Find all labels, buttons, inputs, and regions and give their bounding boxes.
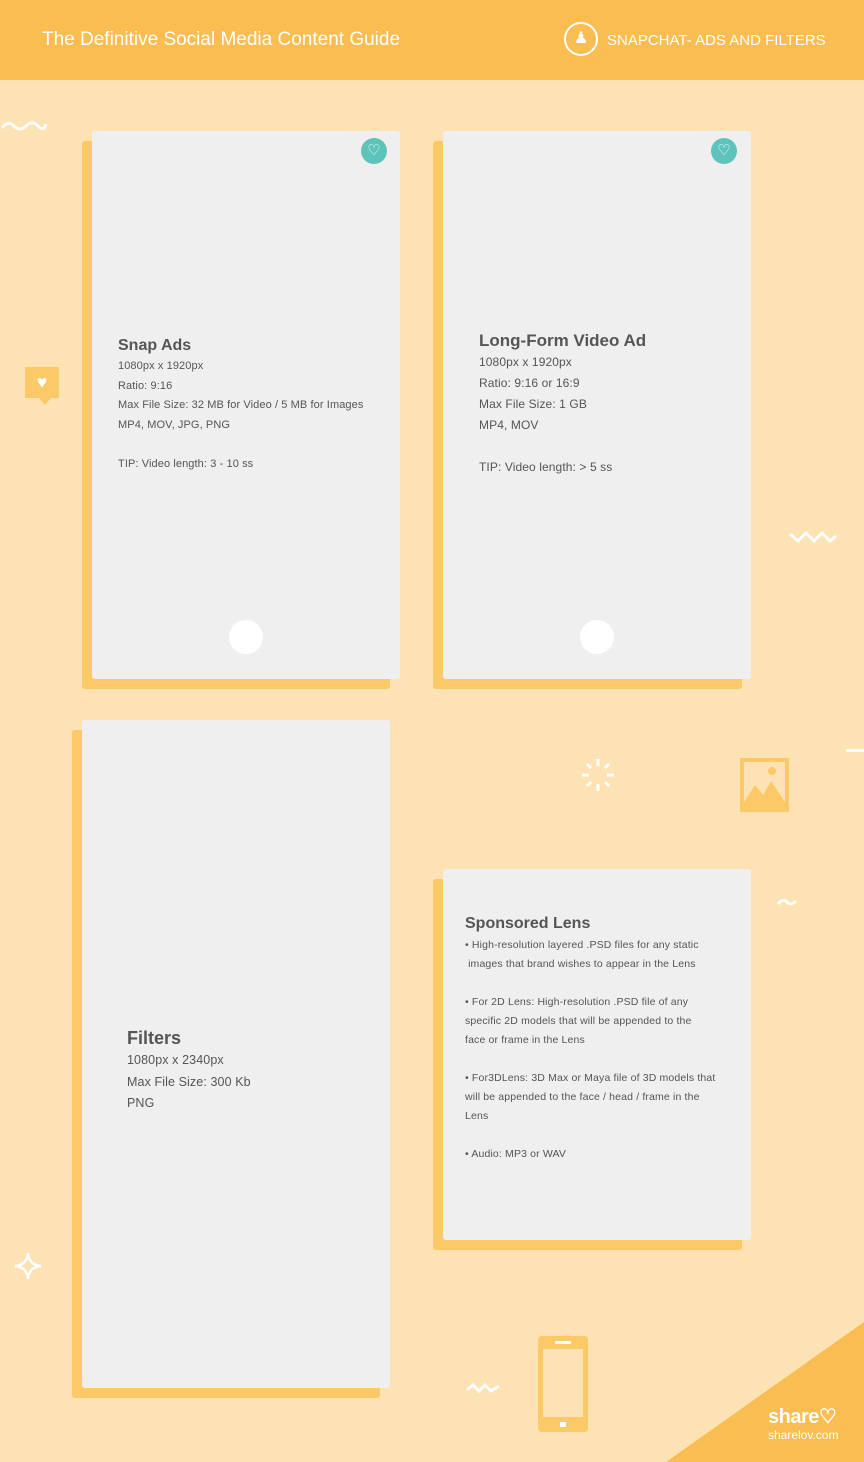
text: sponsored lens specs: • For3DLens: 3D Max or Maya file of 3D models that [465, 1072, 715, 1084]
text: snap ads specs [118, 337, 363, 470]
text: long-form specs: TIP: Video length: > 5 ss [479, 460, 612, 474]
text: long-form specs: Ratio: 9:16 or 16:9 [479, 376, 580, 390]
text: sponsored lens specs: will be appended to the face / head / frame in the [465, 1091, 700, 1103]
text: long-form specs: Max File Size: 1 GB [479, 397, 587, 411]
text: snap ads specs: MP4, MOV, JPG, PNG [118, 418, 230, 430]
text: long-form specs: MP4, MOV [479, 418, 538, 432]
text: sponsored lens specs: • Audio: MP3 or WAV [465, 1148, 566, 1160]
icon: heart badge [711, 138, 737, 164]
text: filters specs: Max File Size: 300 Kb [127, 1074, 251, 1088]
text: sponsored lens specs: • High-resolution layered .PSD files for any static [465, 939, 699, 951]
text: sponsored lens specs: • For 2D Lens: High-resolution .PSD file of any [465, 996, 688, 1008]
text: long-form specs: 1080px x 1920px [479, 355, 572, 369]
text: filters specs: PNG [127, 1096, 154, 1110]
decoration: squiggle [466, 1383, 500, 1393]
text: long-form specs [479, 331, 646, 474]
text: snap ads specs: Snap Ads [118, 337, 191, 354]
decoration: sparkle [14, 1252, 42, 1280]
logo: share♡ [768, 1406, 836, 1428]
icon: heart badge: ♡ [367, 142, 381, 159]
icon: home button [229, 620, 263, 654]
panel: filters [72, 720, 390, 1398]
title: The Definitive Social Media Content Guide [42, 29, 400, 50]
icon: image [740, 758, 789, 812]
text: filters specs [127, 1028, 251, 1110]
text: sponsored lens specs: Lens [465, 1110, 488, 1122]
icon: heart badge: ♡ [717, 142, 731, 159]
icon: phone [538, 1336, 588, 1432]
text: snap ads specs: Max File Size: 32 MB for Video / 5 MB for Images [118, 399, 363, 411]
decoration: tilde [777, 898, 797, 906]
text: sponsored lens specs [465, 915, 716, 1160]
footer corner with logo [666, 1322, 864, 1462]
header bar [0, 0, 864, 80]
decoration: line [846, 749, 864, 752]
icon: snapchat: ♟ [574, 30, 588, 47]
text: sponsored lens specs: images that brand wishes to appear in the Lens [468, 958, 696, 970]
text: snap ads specs: TIP: Video length: 3 - 10 ss [118, 458, 253, 470]
text: sponsored lens specs: specific 2D models that will be appended to the [465, 1015, 692, 1027]
text: filters specs: 1080px x 2340px [127, 1053, 224, 1067]
decoration: zigzag [789, 531, 837, 543]
icon: loading [582, 759, 614, 791]
icon: chat heart: ♥ [37, 372, 47, 392]
text: sponsored lens specs: Sponsored Lens [465, 915, 590, 932]
icon: chat heart [25, 367, 59, 405]
text: long-form specs: Long-Form Video Ad [479, 331, 646, 350]
url: sharelov.com [768, 1428, 838, 1442]
text: sponsored lens specs: face or frame in the Lens [465, 1034, 585, 1046]
icon: snapchat [564, 22, 598, 56]
panel: long-form video ad [433, 131, 751, 689]
section label: SNAPCHAT- ADS AND FILTERS [607, 32, 826, 49]
text: snap ads specs: 1080px x 1920px [118, 360, 203, 372]
text: filters specs: Filters [127, 1028, 181, 1048]
icon: home button [580, 620, 614, 654]
panel: sponsored lens [433, 869, 751, 1250]
decoration: squiggle [0, 122, 48, 130]
panel: snap ads [82, 131, 400, 689]
text: snap ads specs: Ratio: 9:16 [118, 380, 172, 392]
icon: heart badge [361, 138, 387, 164]
